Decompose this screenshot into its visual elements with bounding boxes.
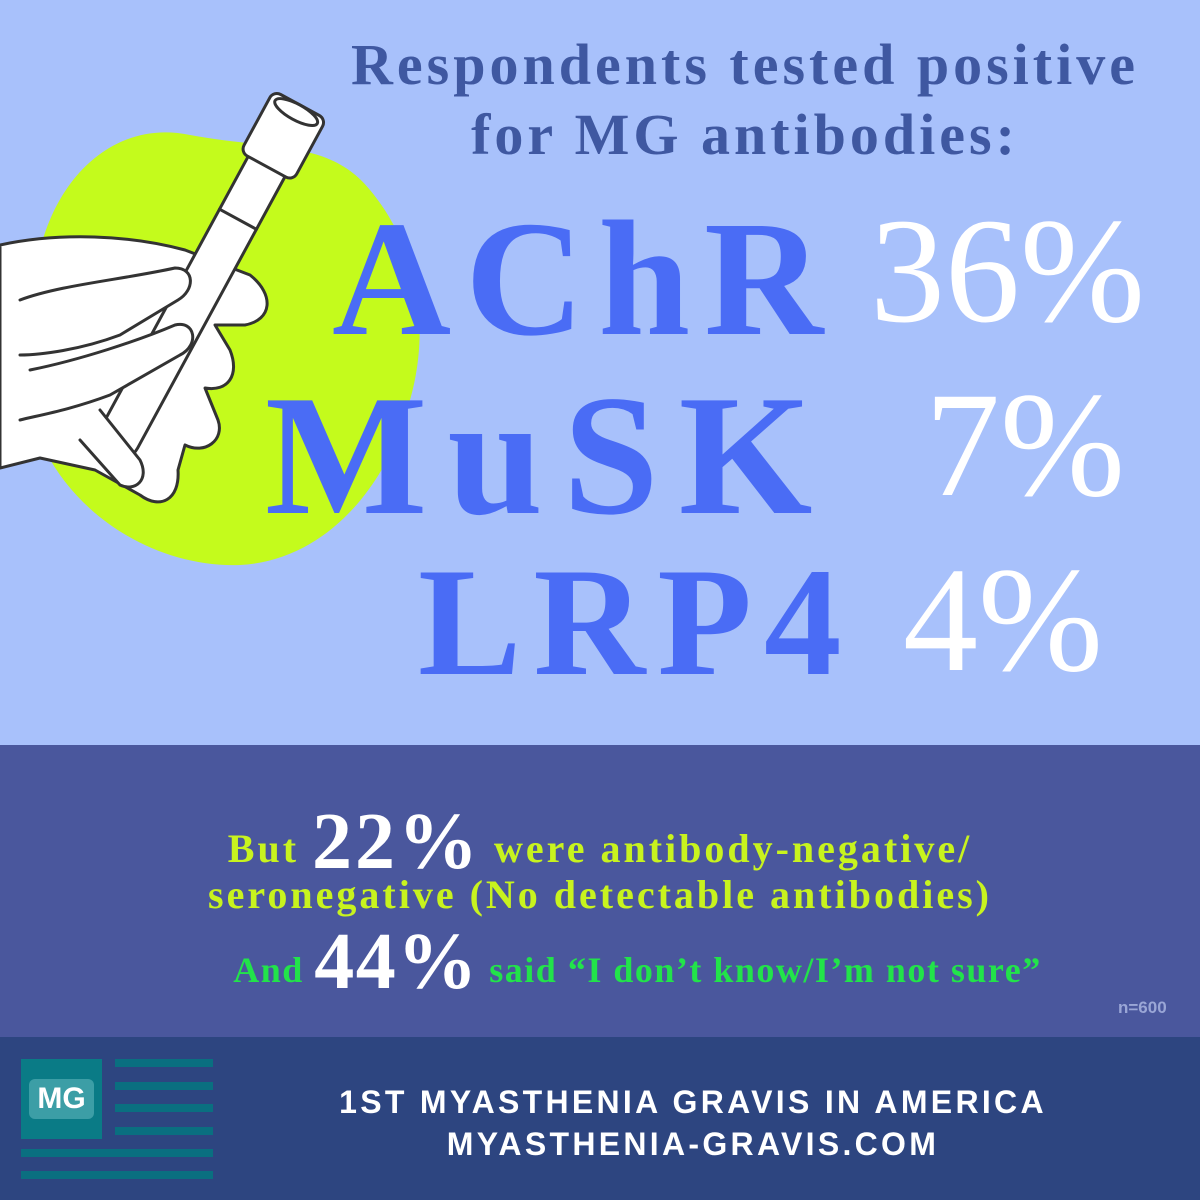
- footer: [0, 1037, 1200, 1200]
- logo: [21, 1059, 213, 1179]
- dark band: [0, 745, 1200, 1037]
- stat row: LRP4: 4%: [903, 537, 1103, 703]
- stat row: MuSK: 7%: [925, 362, 1125, 528]
- stat row: MuSK: MuSK: [265, 361, 832, 551]
- footer text: MYASTHENIA-GRAVIS.COM: [447, 1126, 939, 1162]
- background illustration: hand holding test tube: [0, 92, 420, 566]
- stat row: AChR: [332, 187, 1145, 370]
- test tube: [83, 91, 326, 471]
- title: [351, 32, 1139, 167]
- stat row: LRP4: LRP4: [418, 536, 854, 708]
- title: for MG antibodies:: [471, 102, 1019, 167]
- stat row: LRP4: [418, 536, 1103, 708]
- fingers over tube: [20, 268, 190, 355]
- seronegative stat: But 22% were antibody-negative/: [228, 798, 972, 886]
- stat row: MuSK: [265, 361, 1125, 551]
- logo: MG: [37, 1082, 86, 1115]
- footer text: 1ST MYASTHENIA GRAVIS IN AMERICA: [339, 1084, 1047, 1120]
- sample size: n=600: [1118, 998, 1167, 1017]
- stat row: AChR: AChR: [332, 187, 837, 370]
- seronegative stat: seronegative (No detectable antibodies): [208, 872, 992, 917]
- green blob: [28, 132, 420, 565]
- footer text: [339, 1084, 1047, 1162]
- stat row: AChR: 36%: [870, 188, 1145, 354]
- hand back: [0, 237, 267, 502]
- title: Respondents tested positive: [351, 32, 1139, 97]
- unsure stat: And 44% said “I don’t know/I’m not sure”: [233, 918, 1042, 1006]
